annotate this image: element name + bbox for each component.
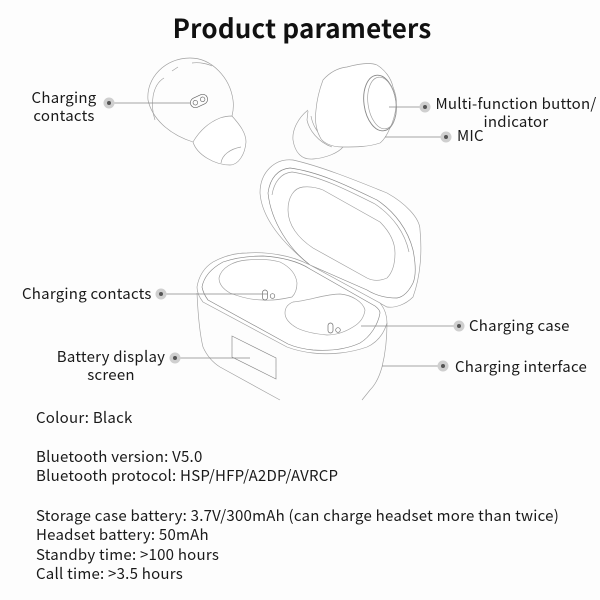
label: charging case: Charging case bbox=[469, 315, 570, 336]
label: charging contacts top bbox=[32, 87, 96, 126]
label: charging contacts top: contacts bbox=[33, 105, 95, 126]
label: charging interface: Charging interface bbox=[455, 356, 587, 377]
text block: bluetooth: Bluetooth protocol: HSP/HFP/A2DP/AVRCP bbox=[36, 465, 338, 486]
text block: battery specs: Headset battery: 50mAh bbox=[36, 524, 209, 545]
text block: bluetooth bbox=[36, 446, 338, 486]
label: multi-function button: indicator bbox=[484, 111, 548, 132]
label: battery display screen bbox=[57, 346, 165, 385]
text block: battery specs: Call time: >3.5 hours bbox=[36, 563, 183, 584]
text block: battery specs: Standby time: >100 hours bbox=[36, 544, 219, 564]
text block: battery specs bbox=[36, 504, 559, 584]
title: Product parameters bbox=[173, 9, 431, 46]
icon: charging case base bbox=[197, 253, 387, 400]
label: MIC: MIC bbox=[457, 125, 484, 146]
icon: contact pins bbox=[262, 290, 340, 333]
label: charging contacts top: Charging bbox=[32, 87, 96, 108]
label: battery display screen: screen bbox=[87, 364, 135, 385]
icon: left earbud bbox=[148, 58, 246, 165]
label: battery display screen: Battery display bbox=[57, 346, 165, 367]
text block: bluetooth: Bluetooth version: V5.0 bbox=[36, 446, 203, 467]
text block: colour: Colour: Black bbox=[36, 407, 133, 428]
text block: battery specs: Storage case battery: 3.7V/300mAh (can charge headset more than twice) bbox=[36, 504, 559, 526]
icon: charging case lid bbox=[260, 160, 421, 307]
icon: right earbud bbox=[293, 64, 400, 159]
label: multi-function button: Multi-function button/ bbox=[435, 93, 597, 114]
label: multi-function button bbox=[435, 93, 597, 132]
label: charging contacts case: Charging contacts bbox=[22, 283, 152, 304]
